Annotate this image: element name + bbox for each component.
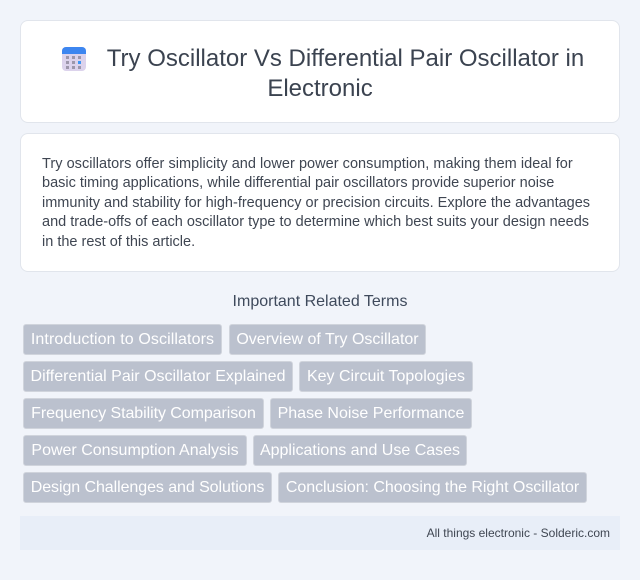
intro paragraph (42, 156, 590, 250)
panel: intro text card (20, 133, 620, 272)
footer bar (20, 516, 620, 550)
tag (23, 398, 264, 429)
panel: title card (20, 20, 620, 123)
tag (278, 472, 587, 503)
intro paragraph: basic timing applications, while differential pair oscillators provide superior noise (42, 175, 554, 191)
tag (23, 361, 293, 392)
tag (23, 435, 247, 466)
tag (253, 435, 467, 466)
tag: Design Challenges and Solutions (31, 479, 264, 496)
footer credit: All things electronic - Solderic.com (427, 526, 610, 540)
tag: Introduction to Oscillators (31, 331, 214, 348)
tag (229, 324, 426, 355)
tag (270, 398, 472, 429)
intro paragraph: in the rest of this article. (42, 234, 195, 250)
intro paragraph: and trade-offs of each oscillator type to determine which best suits your design needs (42, 214, 589, 230)
title: Try Oscillator Vs Differential Pair Oscillator in (107, 45, 584, 72)
tag (299, 361, 473, 392)
icon: calendar (62, 47, 86, 71)
title: Electronic (267, 75, 373, 102)
tag: Frequency Stability Comparison (31, 405, 256, 422)
tag: Differential Pair Oscillator Explained (31, 368, 285, 385)
tag: Conclusion: Choosing the Right Oscillator (286, 479, 579, 496)
intro paragraph: immunity and stability for high-frequency or precision circuits. Explore the advantages (42, 194, 590, 210)
tag: Phase Noise Performance (278, 405, 464, 422)
tag: Key Circuit Topologies (307, 368, 465, 385)
tag: Power Consumption Analysis (31, 442, 239, 459)
title (107, 45, 584, 102)
tag list (23, 324, 587, 503)
tag (23, 472, 272, 503)
intro paragraph: Try oscillators offer simplicity and lower power consumption, making them ideal for (42, 156, 573, 172)
tag: Overview of Try Oscillator (236, 331, 419, 348)
tag (23, 324, 222, 355)
heading: related terms: Important Related Terms (233, 293, 407, 310)
tag: Applications and Use Cases (260, 442, 460, 459)
